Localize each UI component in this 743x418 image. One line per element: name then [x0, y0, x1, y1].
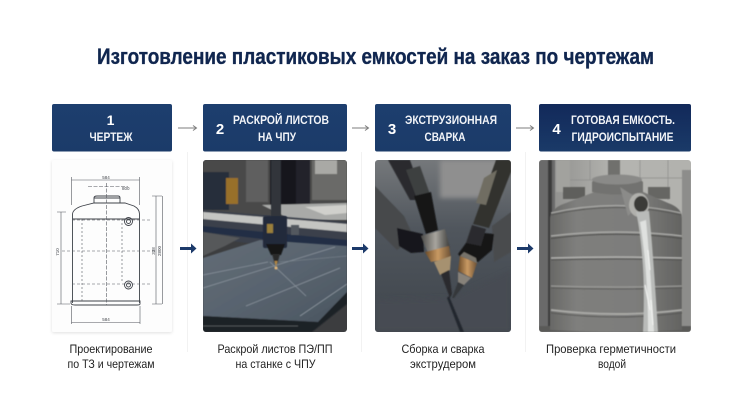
step 3 header: СВАРКА: [424, 130, 466, 144]
step 2 header: РАСКРОЙ ЛИСТОВ: [233, 112, 329, 127]
arrow: header 3 to 4: [516, 126, 534, 130]
workshop background: [203, 160, 347, 220]
caption: step 2: Раскрой листов ПЭ/ПП: [218, 342, 332, 356]
step 4 header: ГОТОВАЯ ЕМКОСТЬ.: [571, 113, 675, 127]
arrow: image 2 to 3: [352, 244, 368, 254]
step 4 header: 4: [552, 121, 561, 138]
caption: step 1: [68, 342, 154, 371]
caption: step 1: по ТЗ и чертежам: [68, 357, 154, 371]
step 4 header: ГИДРОИСПЫТАНИЕ: [572, 130, 674, 144]
caption: step 2: на станке с ЧПУ: [236, 357, 316, 371]
vent grate: [291, 225, 299, 235]
caption: step 3: экструдером: [410, 357, 476, 371]
step 1 header: ЧЕРТЕЖ: [90, 130, 133, 144]
background wall: [539, 160, 691, 332]
step 2 header: НА ЧПУ: [258, 130, 296, 144]
step 3 header: 3: [388, 121, 396, 138]
caption: step 1: Проектирование: [70, 342, 153, 356]
caption: step 3: Сборка и сварка: [402, 342, 485, 356]
step 4 header: [539, 104, 691, 152]
arrow: image 1 to 2: [180, 244, 196, 254]
drawing labels: 710: [55, 248, 60, 256]
step 1 header: [52, 104, 172, 152]
drawing labels: 584: [102, 175, 110, 180]
right sleeve: [473, 160, 511, 228]
step 2 header: 2: [216, 121, 224, 138]
left sleeve: [375, 186, 414, 250]
caption: step 4: [546, 342, 676, 371]
step 3 header: [375, 104, 511, 152]
left nozzle: [420, 229, 450, 252]
arrow: header 2 to 3: [352, 126, 368, 130]
panel: tank drawing: [52, 160, 172, 332]
panel: extrusion welding photo: [375, 160, 511, 332]
caption: step 4: водой: [598, 357, 626, 371]
drawing labels: 584: [102, 317, 110, 322]
step 2 header: [203, 104, 347, 152]
tank ribs: [551, 206, 682, 317]
seam: [447, 296, 464, 332]
title: Изготовление пластиковых емкостей на заказ по чертежам: [97, 44, 654, 69]
step 3 header: ЭКСТРУЗИОННАЯ: [405, 113, 497, 127]
right nozzle: [458, 256, 477, 278]
drawing labels: 338: [151, 247, 156, 255]
column dividers: [188, 152, 526, 352]
cut sheet: [203, 240, 347, 332]
caption: step 4: Проверка герметичности: [546, 342, 676, 356]
caption: step 3: [402, 342, 485, 371]
drawing labels: 800: [122, 186, 130, 191]
arrow: image 3 to 4: [517, 244, 534, 254]
cutting head: [263, 160, 287, 270]
gantry: [203, 210, 347, 256]
drawing labels: [55, 175, 162, 322]
drawing labels: 2800: [157, 245, 162, 256]
arrow: header 1 to 2: [178, 126, 196, 130]
outlet and water stream: [620, 187, 658, 332]
panel: hydro test photo: [539, 160, 691, 332]
caption: step 2: [218, 342, 332, 371]
step 1 header: 1: [107, 112, 115, 128]
tank body: [550, 174, 682, 332]
tank outline: [71, 196, 140, 305]
panel: CNC cutting photo: [203, 160, 347, 332]
dimension lines: [57, 177, 162, 324]
